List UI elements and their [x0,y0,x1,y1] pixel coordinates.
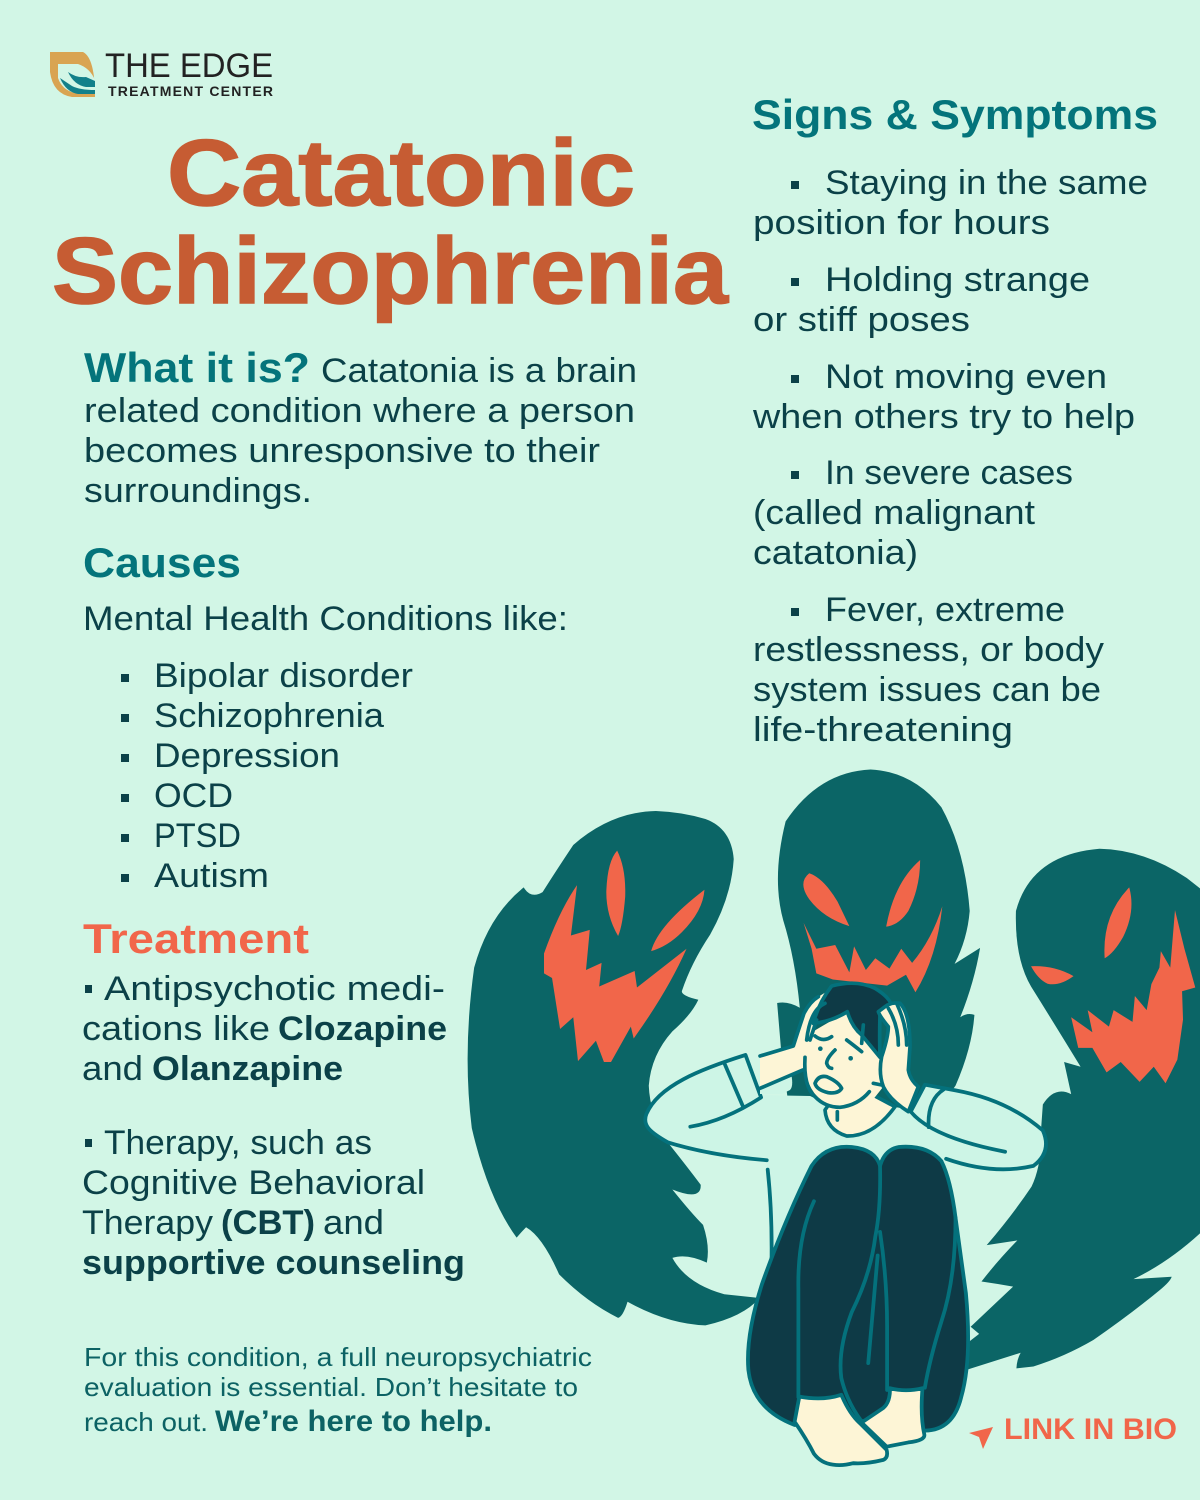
person: torso and arms [645,1055,1046,1279]
heading: treatment: Treatment [83,915,309,962]
causes list: Depression [154,737,340,775]
symptom list: catatonia) [753,534,918,572]
heading: causes: Causes [83,539,241,586]
person: right hand [878,1003,918,1112]
symptom list: position for hours [753,204,1050,242]
symptom list: or stiff poses [753,301,970,339]
panel: causes [83,539,568,895]
person: neck [825,1093,895,1136]
causes list: Bipolar disorder [154,657,413,695]
ghost face: centre mouth [804,906,942,992]
title: Schizophrenia [52,218,729,323]
person: head and hands [760,983,918,1136]
symptom list: Staying in the same [825,164,1148,202]
causes list: OCD [154,777,233,815]
causes list: PTSD [154,817,241,855]
person: facial features [815,1036,862,1093]
footer note: For this condition, a full neuropsychiatric [84,1342,592,1372]
panel: treatment [82,915,465,1282]
treatment item: therapy: and [323,1204,384,1242]
causes list: Schizophrenia [154,697,384,735]
ghost: left [468,811,760,1325]
symptom list: Fever, extreme [825,591,1065,629]
text block: what it is: Catatonia is a brain [321,352,637,390]
person: left foot [795,1395,887,1465]
icon: logo leaf [50,52,95,97]
causes list: Autism [154,857,269,895]
treatment item: medication: Olanzapine [152,1050,343,1088]
text block: what it is: What it is? [84,344,310,391]
illustration: ghosts and person [468,769,1200,1465]
person: face [805,1012,883,1107]
symptom list: In severe cases [825,454,1073,492]
footer note [84,1342,592,1438]
title: Catatonic [167,120,635,225]
person: right foot [862,1388,924,1447]
ghost face: right eyes [1031,887,1131,984]
symptom list: Not moving even [825,358,1107,396]
treatment item: therapy: Therapy [82,1204,213,1242]
treatment item: medication [82,970,447,1088]
treatment item: therapy: supportive counseling [82,1244,465,1282]
treatment item: medication: cations like [82,1010,270,1048]
symptom list: when others try to help [752,398,1135,436]
symptom list: life-threatening [753,711,1013,749]
person: left forearm and hand [760,990,830,1088]
treatment item: medication: and [82,1050,143,1088]
logo wordmark: THE EDGE [105,47,273,85]
symptom list: restlessness, or body [753,631,1104,669]
panel: signs and symptoms [752,91,1158,749]
title [52,120,729,323]
footer note: evaluation is essential. Don’t hesitate to [84,1372,578,1402]
ghost face: centre eyes [803,860,920,927]
person: hair [813,983,891,1057]
text block: what it is: related condition where a person [84,392,635,430]
ghost: centre [777,769,980,1119]
causes intro: Mental Health Conditions like: [83,600,568,638]
icon: arrow [969,1427,993,1449]
heading: signs and symptoms: Signs & Symptoms [752,91,1158,138]
treatment item: therapy: Therapy, such as [104,1124,372,1162]
treatment item: therapy [82,1124,465,1282]
treatment item: medication: Antipsychotic medi- [104,970,445,1008]
treatment item: therapy: Cognitive Behavioral [82,1164,425,1202]
person: small shirt patch under forearm [760,1077,792,1094]
causes list [121,657,413,895]
symptom list: (called malignant [753,494,1036,532]
ghost face: right mouth [1071,910,1195,1083]
symptom list [752,164,1148,749]
symptom list: system issues can be [753,671,1101,709]
link in bio: LINK IN BIO [1004,1413,1177,1446]
ghost face: left eyes [606,851,704,951]
ghost face: left mouth [544,885,687,1062]
footer note: We’re here to help. [215,1405,492,1438]
text block: what it is: surroundings. [84,472,312,510]
text block: what it is [84,344,637,510]
logo wordmark: TREATMENT CENTER [108,83,273,99]
logo [50,47,273,99]
ghost: right [967,849,1200,1370]
symptom list: Holding strange [825,261,1090,299]
person: body [645,1055,1046,1465]
treatment item: medication: Clozapine [278,1010,447,1048]
footer note: reach out. [84,1407,208,1437]
text block: what it is: becomes unresponsive to their [84,432,600,470]
treatment item: therapy: (CBT) [221,1204,315,1242]
person: legs [748,1147,968,1431]
